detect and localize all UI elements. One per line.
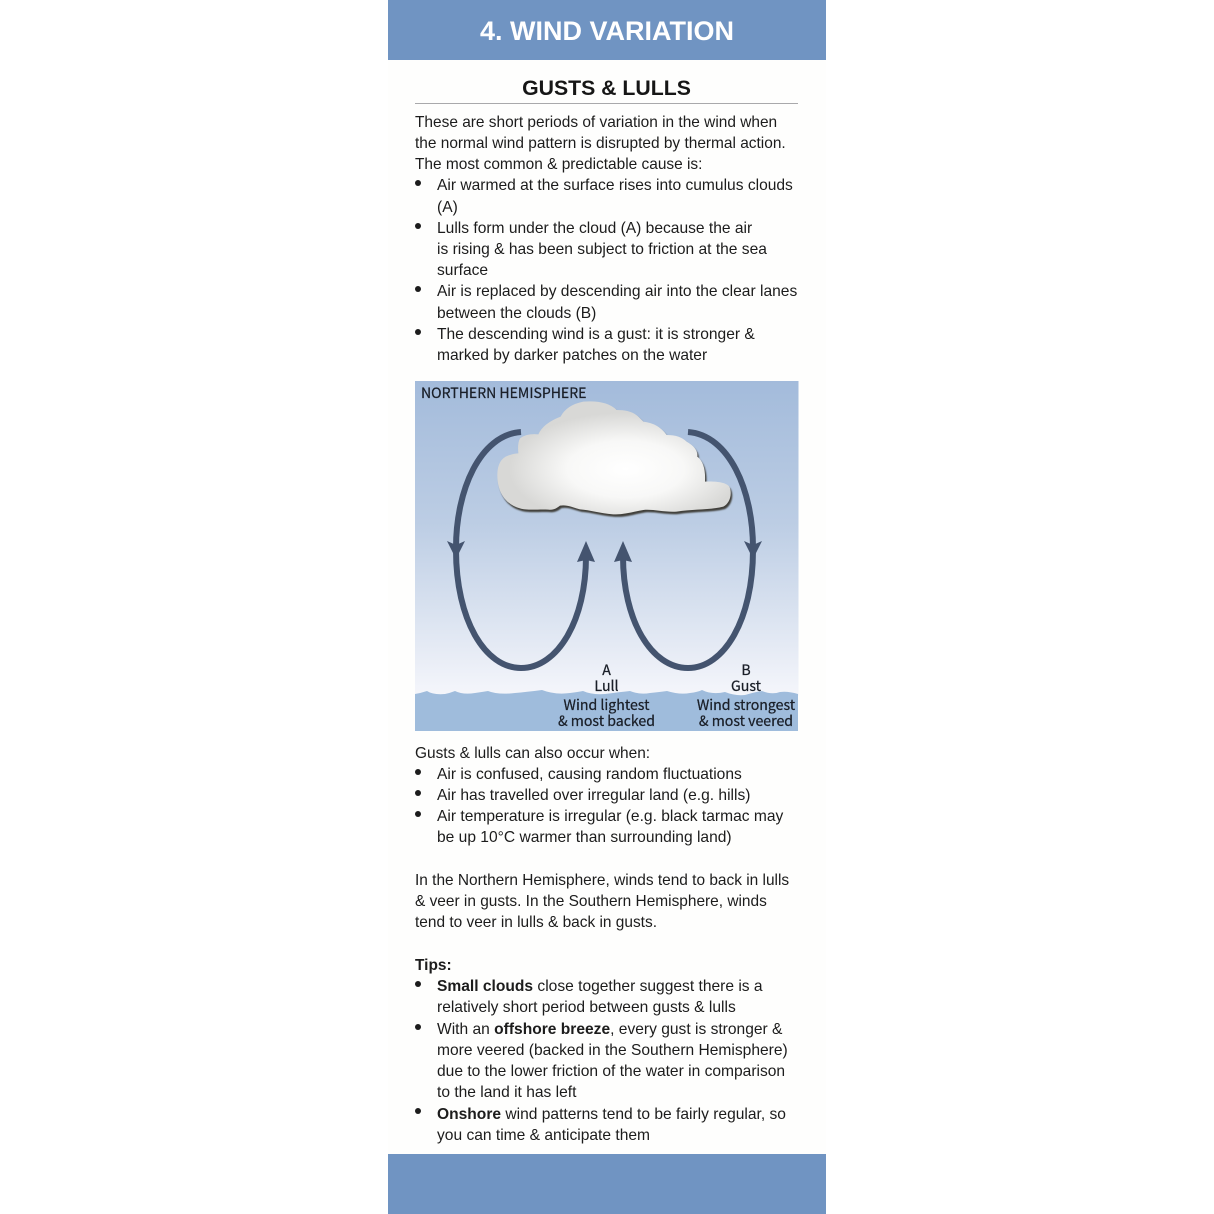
intro text block: surface (437, 262, 488, 279)
heading: gusts and lulls (415, 74, 798, 104)
intro text block: the normal wind pattern is disrupted by thermal action. (415, 135, 786, 152)
text block: tips: due to the lower friction of the water in comparison (437, 1063, 785, 1080)
intro text block: The descending wind is a gust: it is stronger & (437, 326, 755, 343)
label: B gust: & most veered (699, 711, 793, 731)
text block: tips: you can time & anticipate them (437, 1127, 650, 1144)
text block: tips: Small clouds close together suggest there is a (437, 978, 763, 995)
header band with title: 4. WIND VARIATION (480, 16, 734, 46)
text block: other causes: Air has travelled over irregular land (e.g. hills) (437, 787, 750, 804)
sky background (415, 381, 798, 696)
text block: hemispheres: & veer in gusts. In the Southern Hemisphere, winds (415, 893, 767, 910)
text block: other causes: Air is confused, causing random fluctuations (437, 766, 742, 783)
page panel (388, 60, 826, 1154)
text block: tips: more veered (backed in the Southern Hemisphere) (437, 1042, 788, 1059)
text block: other causes (415, 745, 784, 846)
intro text block: Air warmed at the surface rises into cumulus clouds (437, 177, 793, 194)
label: B gust (697, 660, 796, 731)
text block: hemispheres: In the Northern Hemisphere, winds tend to back in lulls (415, 872, 789, 889)
arrow: right descending air (688, 432, 762, 559)
label: A lull: A (602, 660, 611, 680)
intro text block: Air is replaced by descending air into the clear lanes (437, 283, 797, 300)
intro text block: These are short periods of variation in the wind when (415, 114, 777, 131)
label: northern hemisphere: NORTHERN HEMISPHERE (421, 383, 586, 403)
label: B gust: Wind strongest (697, 695, 796, 715)
arrow: left descending air (447, 432, 521, 559)
footer band (388, 1154, 826, 1214)
intro text block: marked by darker patches on the water (437, 347, 707, 364)
header band with title (388, 0, 826, 60)
text block: hemispheres: tend to veer in lulls & back in gusts. (415, 914, 657, 931)
text block: other causes: be up 10°C warmer than surrounding land) (437, 829, 732, 846)
text block: other causes: Gusts & lulls can also occur when: (415, 745, 650, 762)
intro text block (415, 114, 797, 364)
text block: other causes: Air temperature is irregular (e.g. black tarmac may (437, 808, 783, 825)
text block: tips: Onshore wind patterns tend to be fairly regular, so (437, 1106, 786, 1123)
icon: cloud (497, 401, 732, 517)
label: A lull: & most backed (558, 711, 655, 731)
label: B gust: Gust (731, 676, 762, 696)
intro text block: is rising & has been subject to friction at the sea (437, 241, 767, 258)
label: A lull (558, 660, 655, 731)
arrow: right rising air (614, 541, 753, 668)
label: A lull: Wind lightest (564, 695, 650, 715)
text block: hemispheres (415, 872, 789, 931)
intro text block: The most common & predictable cause is: (415, 156, 702, 173)
water with wavy surface (415, 690, 798, 731)
intro text block: between the clouds (B) (437, 305, 596, 322)
intro text block: Lulls form under the cloud (A) because the air (437, 220, 752, 237)
label: B gust: B (741, 660, 751, 680)
text block: tips: relatively short period between gusts & lulls (437, 999, 736, 1016)
text block: tips: With an offshore breeze, every gust is stronger & (437, 1021, 782, 1038)
label: A lull: Lull (594, 676, 619, 696)
text block: tips: to the land it has left (437, 1084, 576, 1101)
text block: tips (415, 957, 788, 1144)
heading: gusts and lulls: GUSTS & LULLS (522, 76, 691, 100)
intro text block: (A) (437, 199, 458, 216)
text block: tips: Tips: (415, 957, 452, 974)
arrow: left rising air (456, 541, 595, 668)
